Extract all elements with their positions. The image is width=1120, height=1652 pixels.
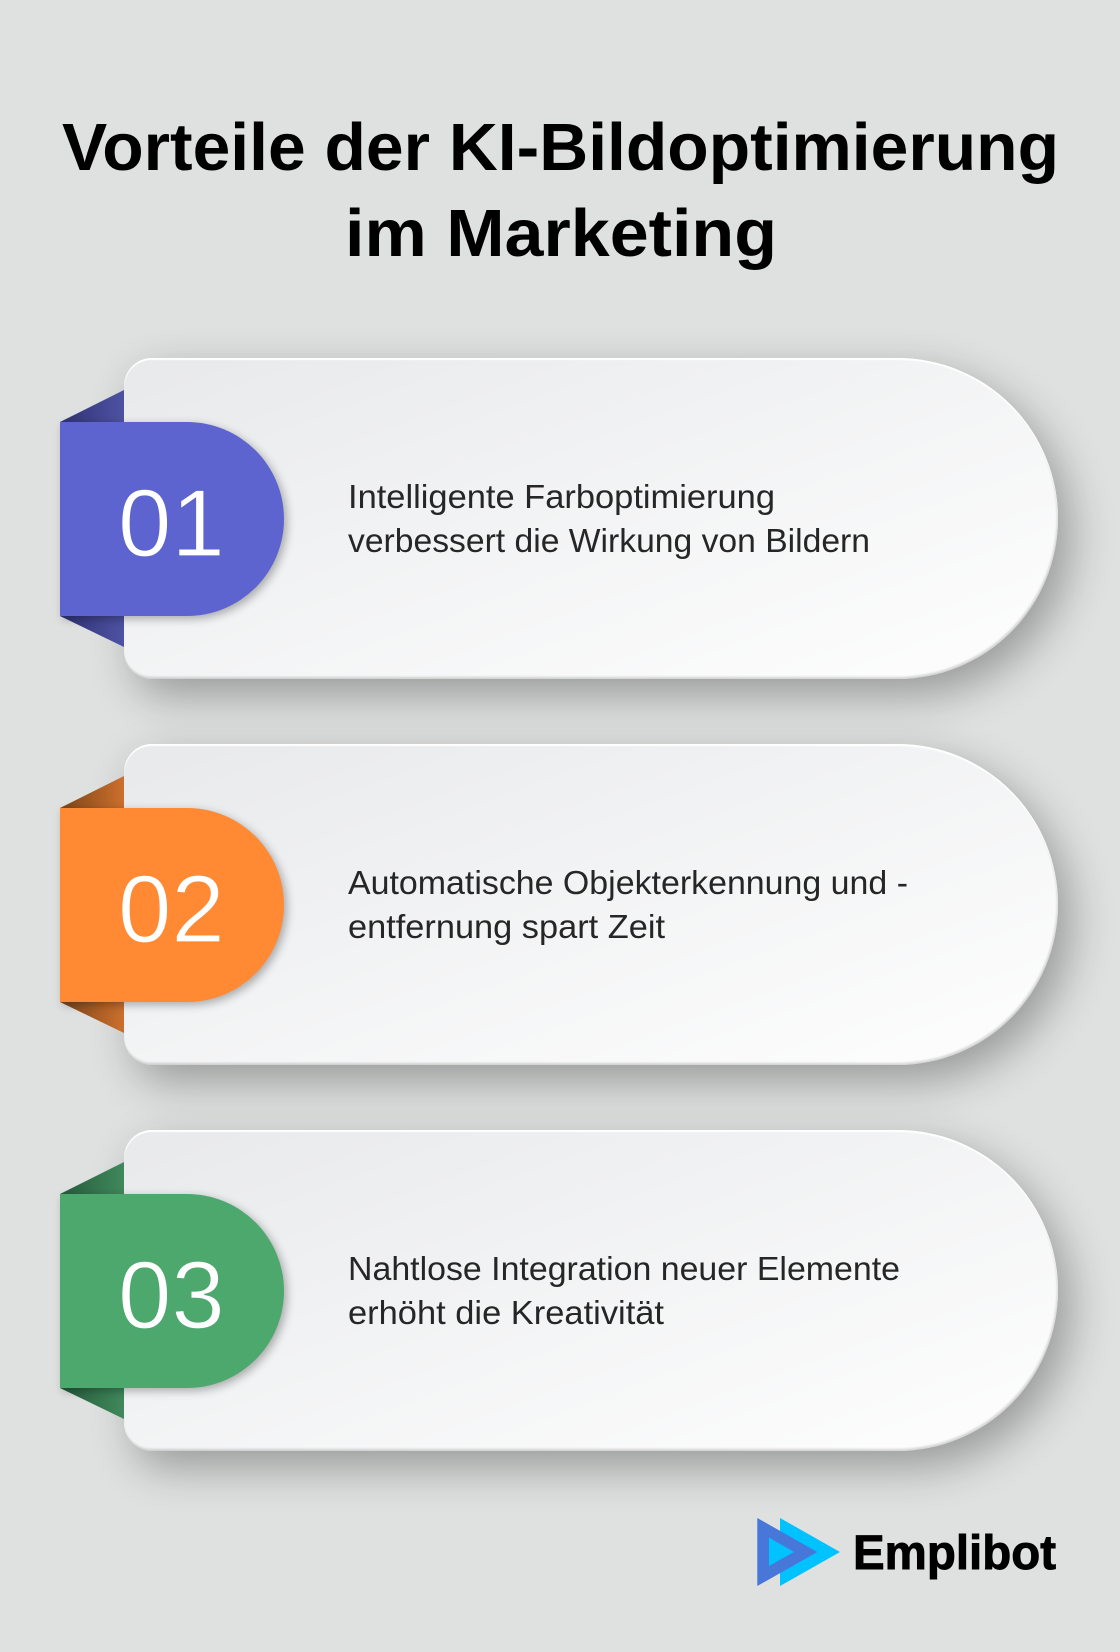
ribbon folds	[60, 1162, 124, 1419]
benefit text	[348, 478, 870, 559]
benefit text: entfernung spart Zeit	[348, 908, 665, 945]
logo: Emplibot	[757, 1518, 1056, 1586]
ribbon folds	[60, 776, 124, 1033]
number badge	[60, 422, 284, 616]
title: Vorteile der KI-Bildoptimierung	[62, 110, 1059, 185]
panel: benefit 03	[58, 1121, 1094, 1492]
card background	[124, 744, 1058, 1065]
title	[62, 110, 1059, 271]
benefit text: erhöht die Kreativität	[348, 1294, 664, 1331]
icon: double play triangles	[757, 1518, 840, 1586]
card background	[124, 358, 1058, 679]
wordmark: Emplibot	[853, 1527, 1056, 1580]
ribbon folds	[60, 390, 124, 647]
number 03: 03	[118, 1242, 225, 1349]
number badge	[60, 808, 284, 1002]
number 01: 01	[118, 470, 225, 577]
benefit text	[348, 864, 908, 945]
title: im Marketing	[345, 196, 777, 271]
number badge	[60, 1194, 284, 1388]
panel: benefit 01	[58, 349, 1094, 720]
panel: benefit 02	[58, 735, 1094, 1106]
benefit text	[348, 1250, 900, 1331]
benefit text: verbessert die Wirkung von Bildern	[348, 522, 870, 559]
card background	[124, 1130, 1058, 1451]
benefit text: Intelligente Farboptimierung	[348, 478, 775, 515]
benefit text: Nahtlose Integration neuer Elemente	[348, 1250, 900, 1287]
number 02: 02	[118, 856, 225, 963]
benefit text: Automatische Objekterkennung und -	[348, 864, 908, 901]
